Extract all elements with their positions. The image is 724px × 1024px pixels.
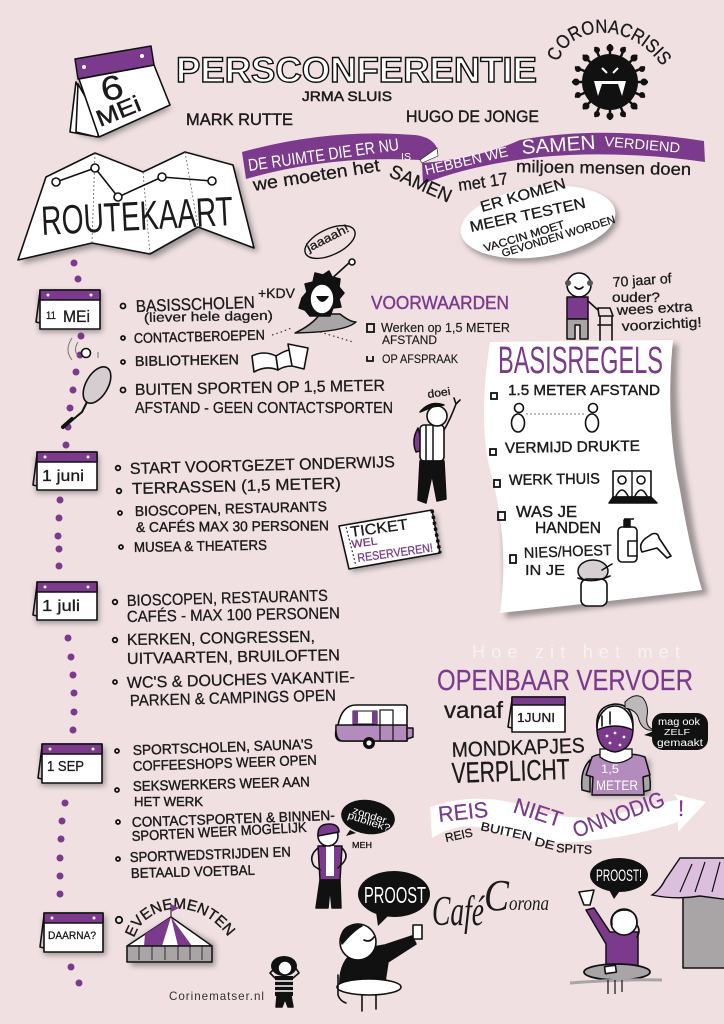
list: 1 juli: KERKEN, CONGRESSEN, [127, 629, 315, 649]
note: 70 jaar of ouder: voorzichtig! [621, 314, 702, 334]
calendar: 1 juni [33, 452, 99, 493]
rule: nies hoest in je: IN JE [525, 562, 565, 579]
subline: samen met 17 miljoen mensen [250, 155, 691, 207]
calendar: 11 mei [36, 290, 102, 332]
list: 11 mei: BUITEN SPORTEN OP 1,5 METER [135, 378, 385, 399]
arrow: reis niet onnodig: REIS [437, 797, 489, 827]
list: 1 juli [113, 588, 355, 710]
icon: caravan [336, 705, 413, 749]
illustration: woman with face mask: METER [596, 777, 638, 793]
list: 11 mei: +KDV [258, 285, 296, 301]
calendar: 6 mei: 6 [97, 68, 127, 110]
section: daarna [39, 898, 236, 970]
text: mondkapjes verplicht: MONDKAPJES [451, 734, 585, 762]
ticket: wel reserveren [339, 510, 442, 572]
icon: sneezing child [578, 560, 612, 606]
calendar: 1 sep [38, 744, 105, 786]
list: 11 mei: (liever hele dagen) [144, 308, 273, 325]
subline: samen met 17 miljoen mensen: SAMEN [386, 161, 455, 207]
section: 11 mei [36, 285, 393, 417]
speech bubble: proost: PROOST [364, 882, 426, 908]
calendar: daarna [40, 913, 106, 955]
list: 11 mei: BIBLIOTHEKEN [135, 351, 239, 369]
calendar: 1 sep: 1 SEP [47, 758, 84, 775]
list: 1 juli: UITVAARTEN, BRUILOFTEN [127, 647, 340, 668]
list: 11 mei: BASISSCHOLEN [135, 293, 255, 316]
title: PERSCONFERENTIE [176, 51, 537, 90]
section: 1 juni [33, 452, 395, 555]
subline: samen met 17 miljoen mensen: we moeten het [250, 155, 381, 195]
coronacrisis heading and virus: CORONACRISIS [548, 19, 671, 64]
list: 1 juni: TERRASSEN (1,5 METER) [132, 476, 341, 498]
list: 1 juli: CAFÉS - MAX 100 PERSONEN [127, 603, 340, 626]
speakers: MARK RUTTE [186, 110, 293, 129]
list: 11 mei [120, 285, 393, 417]
rule: 1.5 meter afstand [491, 382, 660, 432]
calendar: 1 juli [33, 582, 99, 623]
arrow: reis niet onnodig: ONNODIG [569, 786, 668, 843]
rule: was je handen: WAS JE [516, 504, 577, 521]
speech bubble: zonder publiek: zonder [351, 805, 388, 827]
text: mondkapjes verplicht [451, 734, 585, 790]
speech bubble: mag ook zelf gemaakt [644, 713, 708, 750]
ticket: wel reserveren: RESERVEREN! [356, 541, 434, 565]
subtext: reis buiten de spits: SPITS [556, 841, 593, 857]
calendar: 6 mei: MEi [92, 90, 145, 132]
list: 1 juni: START VOORTGEZET ONDERWIJS [130, 454, 395, 478]
speakers: HUGO DE JONGE [406, 107, 539, 126]
list: 1 sep [115, 736, 335, 881]
arrow: reis niet onnodig: ! [678, 796, 684, 821]
list: 1 sep: SPORTSCHOLEN, SAUNA'S [133, 736, 313, 758]
calendar: 1 juni: 1 juni [42, 468, 84, 485]
illustration: man zonder publiek: MEH [352, 841, 372, 850]
coronacrisis heading and virus [548, 19, 671, 120]
illustration: woman with face mask: 1,5 [601, 762, 619, 776]
evenementen arc label: EVENEMENTEN [124, 898, 236, 937]
subtext: reis buiten de spits [444, 819, 593, 857]
subtext: reis buiten de spits: REIS [444, 825, 474, 845]
rule: nies hoest in je: NIES/HOEST [524, 542, 612, 562]
illustration: woman at cafe table [570, 858, 662, 994]
icon: tennis ball and racket [63, 338, 117, 427]
speech bubble: zonder publiek [339, 796, 397, 838]
note: 70 jaar of ouder [612, 270, 702, 334]
panel: voorwaarden: AFSTAND [382, 333, 437, 347]
route line [52, 164, 216, 201]
banner: hebben we samen verdiend [422, 132, 705, 184]
panel: basisregels [484, 340, 708, 618]
map: routekaart: ROUTEKAART [40, 188, 234, 244]
illustration: person toasting proost [337, 871, 430, 1011]
illustration: senior with walker [565, 273, 613, 342]
speech bubble: mag ook zelf gemaakt: mag ook [658, 717, 701, 728]
speech bubble: jaaaah: jaaaah! [303, 221, 351, 255]
rule: was je handen: HANDEN [535, 520, 601, 537]
logo: cafe corona: Café [432, 889, 486, 935]
ticket: wel reserveren: WEL [351, 535, 378, 551]
list: 1 sep: HET WERK [134, 794, 203, 809]
list: 11 mei: AFSTAND - GEEN CONTACTSPORTEN [135, 400, 393, 417]
banner: de ruimte die er nu is: IS [401, 152, 411, 163]
illustration: person waving doei [414, 386, 460, 503]
rule: nies hoest in je [510, 542, 612, 606]
timeline dots [54, 260, 84, 986]
illustration: woman with face mask [582, 696, 708, 796]
subtext: reis buiten de spits: BUITEN [479, 819, 533, 844]
banner: hebben we samen verdiend: VERDIEND [604, 133, 681, 156]
speech bubble: zonder publiek: publiek? [346, 810, 392, 835]
note: 70 jaar of ouder: 70 jaar of [612, 270, 672, 290]
calendar: 11 mei: MEi [63, 307, 90, 326]
panel: voorwaarden: VOORWAARDEN [371, 293, 509, 313]
speech bubble: proost!: PROOST! [596, 866, 642, 885]
note: 70 jaar of ouder: wees extra [615, 298, 693, 318]
illustration: man zonder publiek [312, 796, 397, 908]
subline: samen met 17 miljoen mensen: met 17 [457, 169, 509, 195]
callout: er komen meer testen: GEVONDEN WORDEN [500, 214, 617, 260]
heading: openbaar vervoer [437, 642, 693, 697]
speech bubble: mag ook zelf gemaakt: ZELF [664, 728, 690, 737]
speech bubble: mag ook zelf gemaakt: gemaakt [657, 738, 703, 749]
calendar: 1 juli: 1 juli [42, 598, 80, 615]
icon: laptop [609, 471, 657, 503]
illustration: cafe building with awning [652, 858, 724, 968]
subtext: reis buiten de spits: DE [533, 834, 556, 853]
list: 1 sep: SPORTWEDSTRIJDEN EN [130, 843, 291, 865]
rule: vermijd drukte: VERMIJD DRUKTE [505, 438, 640, 457]
rule: 1.5 meter afstand: 1.5 METER AFSTAND [508, 382, 660, 399]
calendar: daarna: DAARNA? [48, 930, 96, 942]
list: 1 juni: & CAFÉS MAX 30 PERSONEN [136, 517, 329, 535]
list: 1 sep: SEKSWERKERS WEER AAN [133, 773, 310, 794]
calendar: 6 mei [70, 46, 172, 140]
illustration: cheering hairdresser person [295, 219, 360, 333]
credit: Corinematser.nl [169, 989, 265, 1003]
arrow: reis niet onnodig [430, 786, 706, 857]
list: 1 juni: BIOSCOPEN, RESTAURANTS [135, 498, 327, 519]
dotted connectors to voorwaarden [272, 327, 353, 342]
panel: voorwaarden: Werken op 1,5 METER [381, 320, 510, 335]
list: 1 sep: COFFEESHOPS WEER OPEN [133, 752, 317, 774]
list: 1 juni [116, 454, 395, 555]
callout: er komen meer testen: ER KOMEN [478, 175, 568, 216]
panel: voorwaarden [367, 293, 510, 366]
rule: werk thuis [494, 470, 657, 503]
list: 11 mei: CONTACTBEROEPEN [134, 327, 265, 346]
list: 1 juli: PARKEN & CAMPINGS OPEN [130, 688, 336, 710]
note: 70 jaar of ouder: ouder? [612, 289, 660, 305]
list: 1 sep: BETAALD VOETBAL [131, 862, 255, 881]
calendar: 1 juni openbaar vervoer: 1JUNI [517, 710, 555, 725]
calendar: 1 juni openbaar vervoer [508, 697, 565, 732]
ticket: wel reserveren: TICKET [349, 516, 409, 541]
speakers: JRMA SLUIS [302, 88, 392, 104]
arrow: reis niet onnodig: NIET [510, 793, 566, 832]
list: 1 juli: BIOSCOPEN, RESTAURANTS [127, 588, 328, 610]
banner: hebben we samen verdiend: SAMEN [521, 132, 596, 159]
banner: hebben we samen verdiend: HEBBEN WE [423, 143, 509, 178]
list: 1 juli: WC'S & DOUCHES VAKANTIE- [127, 669, 355, 692]
icon: circus tent [127, 904, 215, 966]
rule: werk thuis: WERK THUIS [509, 470, 600, 489]
calendar: 11 mei: 11 [46, 310, 56, 322]
callout: er komen meer testen: VACCIN MOET [482, 219, 567, 255]
logo: cafe corona [432, 871, 549, 935]
logo: cafe corona: Corona [484, 871, 549, 920]
list: 1 sep: SPORTEN WEER MOGELIJK [131, 819, 308, 844]
illustration: striped kid [270, 956, 299, 1007]
text: vanaf: vanaf [444, 697, 504, 723]
section: 1 sep [38, 736, 335, 881]
map: routekaart [18, 152, 258, 264]
list: 1 juni: MUSEA & THEATERS [134, 537, 267, 555]
list: 1 sep: CONTACTSPORTEN & BINNEN- [132, 807, 335, 830]
callout: er komen meer testen [456, 175, 623, 272]
callout: er komen meer testen: MEER TESTEN [468, 195, 587, 236]
section: 1 juli [33, 582, 355, 710]
subline: samen met 17 miljoen mensen: miljoen mensen doen [516, 157, 691, 179]
rule: was je handen [498, 504, 671, 562]
illustration: person waving doei: doei [427, 386, 451, 401]
speakers [186, 88, 539, 129]
banner: de ruimte die er nu is: DE RUIMTE DIE ER NU [247, 135, 400, 175]
text: mondkapjes verplicht: VERPLICHT [451, 754, 570, 790]
icon: virus [572, 44, 648, 120]
panel: voorwaarden: OP AFSPRAAK [382, 352, 458, 366]
icon: soap and hands [618, 519, 671, 562]
icon: open book [252, 344, 308, 372]
heading: openbaar vervoer: Hoe zit het met [472, 642, 680, 662]
